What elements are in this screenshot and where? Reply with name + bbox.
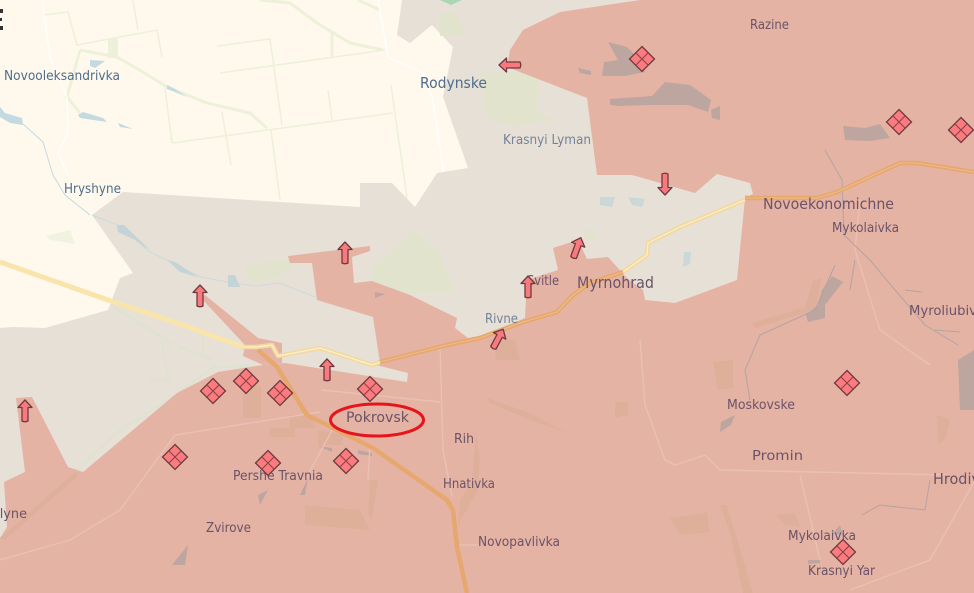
Ukrainian city labels: Myroliubiv [909, 304, 974, 319]
Ukrainian city labels: Hryshyne [64, 182, 121, 197]
occupied wedge toward the north-west [200, 295, 282, 365]
field lines and tree belts [43, 0, 407, 200]
road: E50 highway [0, 163, 974, 593]
forests in the grey zone [245, 10, 598, 317]
cropped dark marks at the left edge [0, 9, 3, 30]
Ukrainian city labels: Hnativka [443, 477, 495, 492]
Ukrainian city labels: Rodynske [420, 74, 487, 92]
Ukrainian city labels: Novoekonomichne [763, 195, 894, 213]
callout: red ellipse around Pokrovsk [330, 404, 424, 436]
Ukrainian city labels: Krasnyi Yar [808, 564, 876, 579]
Ukrainian city labels: Myrnohrad [577, 273, 654, 292]
lakes in occupied territory [172, 42, 974, 565]
Ukrainian city labels: Zvirove [206, 521, 251, 536]
Ukrainian city labels: Novopavlivka [478, 535, 560, 550]
green patch near Hryshyne [46, 230, 75, 244]
Ukrainian city labels: Mykolaivka [788, 529, 856, 544]
Ukrainian city labels: Krasnyi Lyman [503, 133, 591, 148]
Ukrainian city labels: Pershe Travnia [233, 469, 323, 484]
lakes and rivers in the north-west [0, 60, 187, 215]
icons: attack diamonds [162, 46, 974, 564]
Ukrainian city labels: Moskovske [727, 398, 795, 413]
Ukrainian city labels: Mykolaivka [832, 221, 899, 236]
river and lakes across the grey zone [92, 197, 691, 297]
Ukrainian city labels: Svitle [527, 274, 559, 289]
Ukrainian city labels: Razine [750, 18, 789, 33]
arrows: direction of advance [18, 58, 672, 422]
pale roads and rivers over occupied territory [0, 200, 974, 590]
green road strips in the grey zone [77, 308, 262, 470]
white local roads [42, 0, 447, 197]
Ukrainian city labels: Novooleksandrivka [4, 69, 120, 84]
Ukrainian city labels: Rivne [485, 312, 518, 327]
Ukrainian city labels: Rih [454, 432, 474, 447]
Ukrainian city labels: Promin [752, 449, 803, 464]
built-up and field patches [0, 278, 950, 593]
Ukrainian city labels: Pokrovsk [346, 410, 410, 426]
